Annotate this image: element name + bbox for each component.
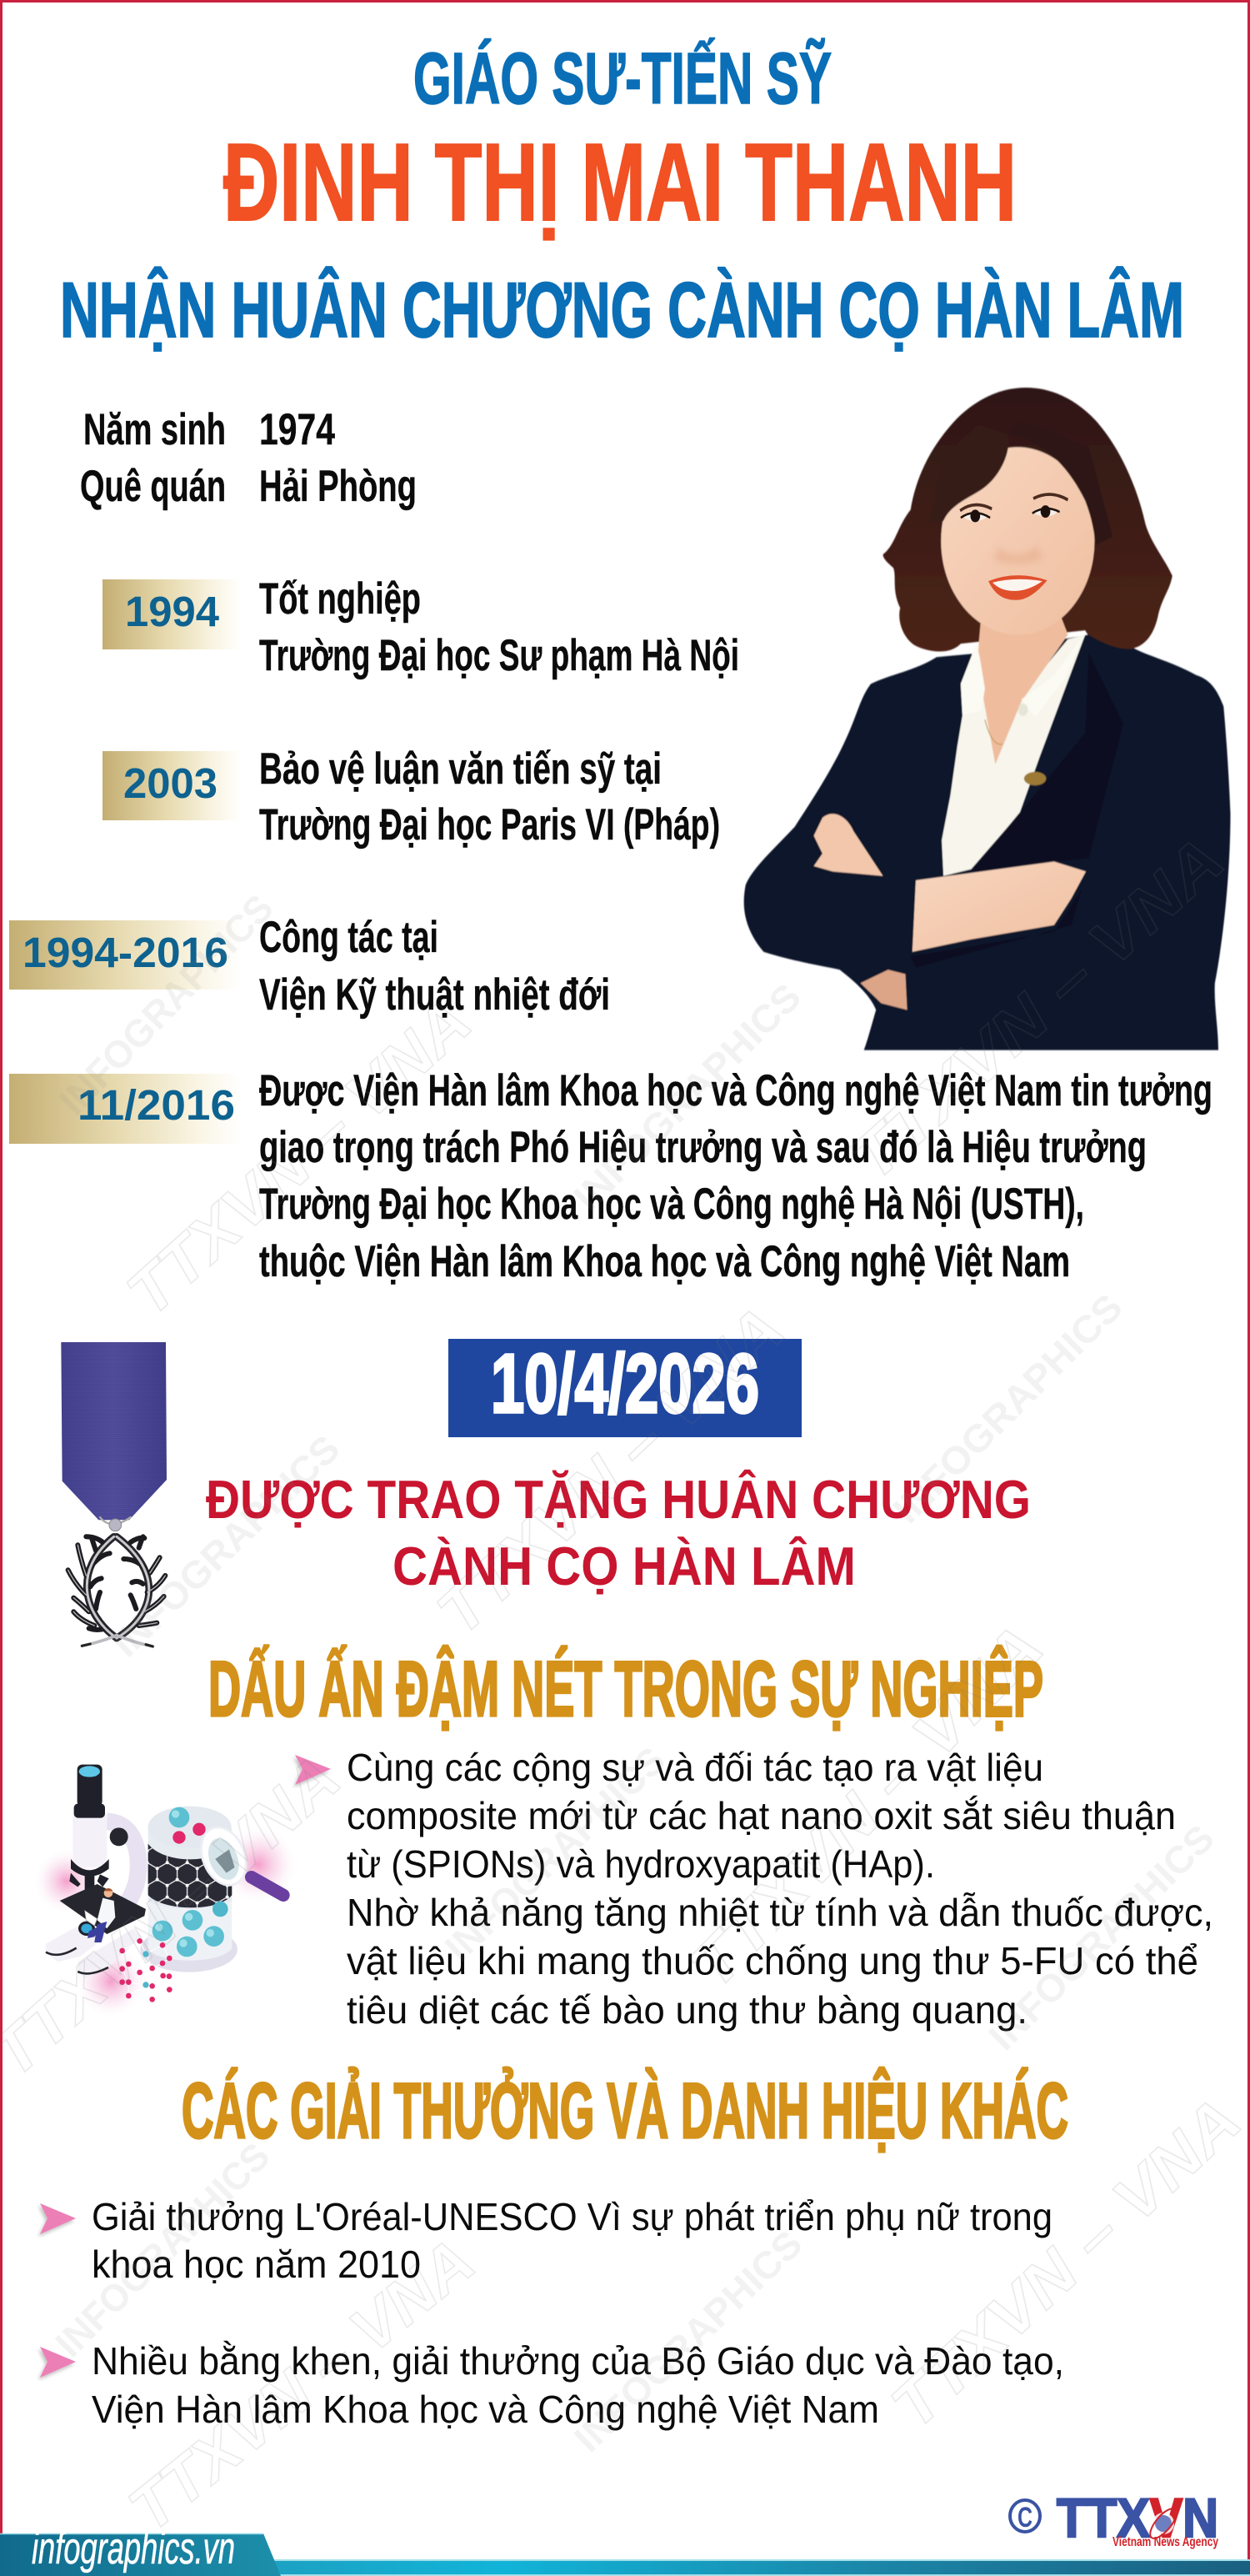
palm wreath — [68, 1517, 165, 1646]
logo tagline: Vietnam News Agency — [1112, 2535, 1218, 2549]
watermarks: INFOGRAPHICS — [566, 2222, 810, 2460]
award heading: ĐƯỢC TRAO TẶNG HUÂN CHƯƠNG — [206, 1469, 1031, 1530]
nano cylinder — [140, 1807, 238, 1972]
home town: Hải Phòng — [259, 462, 417, 511]
timeline 2003 — [102, 744, 720, 849]
watermarks: INFOGRAPHICS — [47, 2134, 278, 2365]
title line 1: GIÁO SƯ-TIẾN SỸ — [413, 38, 832, 119]
watermarks: TTXVN – VNA — [113, 985, 484, 1330]
copyright mark — [1010, 2500, 1040, 2533]
birth year: Năm sinh — [83, 405, 226, 454]
award 1: Giải thưởng L'Oréal-UNESCO Vì sự phát triển phụ nữ trong — [92, 2195, 1052, 2238]
description text: Cùng các cộng sự và đối tác tạo ra vật liệu — [347, 1746, 1043, 1789]
watermarks: TTXVN – VNA — [116, 2225, 488, 2545]
molecule — [119, 1938, 172, 2002]
timeline 2003: 2003 — [123, 759, 218, 807]
watermarks: TTXVN – VNA — [676, 1611, 1057, 2002]
timeline 11/2016: 11/2016 — [78, 1081, 235, 1129]
website text: infographics.vn — [32, 2523, 235, 2573]
microscope — [46, 1765, 146, 1978]
timeline 1994-2016: 1994-2016 — [22, 929, 228, 976]
research description — [295, 1746, 1213, 2032]
timeline 1994: Trường Đại học Sư phạm Hà Nội — [259, 631, 739, 680]
award 1: khoa học năm 2010 — [92, 2243, 421, 2286]
description text: composite mới từ các hạt nano oxit sắt siêu thuận — [347, 1794, 1176, 1837]
arrow bullet — [295, 1755, 331, 1785]
medal icon — [61, 1342, 167, 1646]
title block — [60, 38, 1184, 353]
TTXVN logo — [1010, 2487, 1218, 2549]
watermarks: INFOGRAPHICS — [565, 975, 809, 1219]
watermarks — [0, 824, 1250, 2545]
timeline 2003: Bảo vệ luận văn tiến sỹ tại — [259, 744, 662, 794]
award heading — [206, 1469, 1031, 1596]
timeline 1994-2016: Viện Kỹ thuật nhiệt đới — [259, 970, 610, 1020]
facial features — [960, 494, 1068, 600]
scientist figure — [85, 1888, 115, 1942]
footer band — [0, 2523, 1250, 2576]
award heading: CÀNH CỌ HÀN LÂM — [392, 1536, 856, 1596]
timeline 1994: Tốt nghiệp — [259, 574, 421, 624]
description text: từ (SPIONs) và hydroxyapatit (HAp). — [347, 1842, 935, 1886]
watermarks: TTXVN – VNA — [837, 824, 1238, 1195]
award 2 — [40, 2339, 1064, 2431]
home town — [80, 462, 417, 511]
award date box — [448, 1337, 802, 1437]
watermarks: INFOGRAPHICS — [437, 1738, 673, 1969]
ribbon — [61, 1342, 167, 1520]
timeline — [9, 574, 1212, 1286]
watermarks: INFOGRAPHICS — [884, 1285, 1131, 1531]
awards list — [40, 2195, 1064, 2431]
award 2: Viện Hàn lâm Khoa học và Công nghệ Việt Nam — [92, 2388, 879, 2431]
watermarks: TTXVN – VNA — [878, 2084, 1250, 2442]
home town: Quê quán — [80, 462, 226, 511]
description text: Nhờ khả năng tăng nhiệt từ tính và dẫn thuốc được, — [347, 1891, 1213, 1934]
timeline 1994-2016: Công tác tại — [259, 913, 438, 962]
science illustration — [35, 1765, 296, 2016]
magnifier — [193, 1821, 283, 1895]
copyright mark: C — [1018, 2502, 1032, 2533]
watermarks: TTXVN – VNA — [424, 1293, 798, 1648]
logo letters: TTXVN — [1057, 2487, 1218, 2548]
date text: 10/4/2026 — [491, 1337, 759, 1431]
description text: tiêu diệt các tế bào ung thư bàng quang. — [347, 1988, 1028, 2032]
watermarks: INFOGRAPHICS — [103, 1426, 348, 1665]
timeline 1994-2016 — [9, 913, 610, 1020]
watermarks: INFOGRAPHICS — [51, 886, 282, 1123]
watermarks: INFOGRAPHICS — [980, 1816, 1222, 2058]
award 2: Nhiều bằng khen, giải thưởng của Bộ Giáo dục và Đào tạo, — [92, 2339, 1064, 2383]
footer tab — [0, 2533, 281, 2576]
award 1 — [40, 2195, 1052, 2286]
logo orbit — [1146, 2504, 1181, 2543]
background glows — [35, 1827, 296, 2016]
personal info — [80, 405, 417, 511]
timeline 11/2016 — [9, 1066, 1212, 1286]
description text — [347, 1746, 1213, 2032]
description text: vật liệu khi mang thuốc chống ung thư 5-FU có thể — [347, 1939, 1198, 1982]
timeline 2003: Trường Đại học Paris VI (Pháp) — [259, 800, 720, 849]
timeline 1994 — [102, 574, 739, 680]
portrait photo — [744, 388, 1230, 1050]
timeline 1994: 1994 — [125, 588, 220, 635]
birth year: 1974 — [259, 405, 335, 454]
